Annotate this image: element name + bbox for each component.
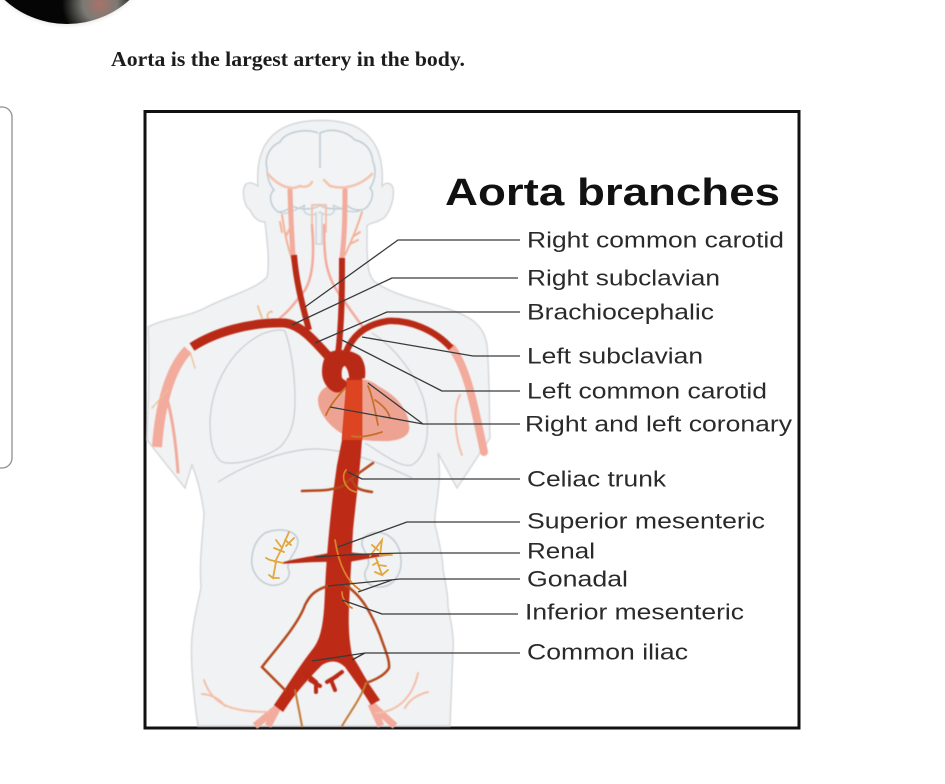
labels: Brachiocephalic	[527, 300, 714, 324]
aorta through heart	[342, 380, 362, 440]
leader lines	[292, 240, 520, 661]
icon: cropped dark circle	[0, 0, 160, 25]
descending aorta	[274, 378, 380, 712]
labels	[525, 228, 792, 664]
labels: Gonadal	[527, 566, 628, 592]
labels: Renal	[527, 538, 595, 564]
labels: Right subclavian	[527, 266, 720, 290]
brain	[266, 130, 375, 212]
brain stem	[316, 212, 322, 244]
labels: Common iliac	[527, 640, 688, 664]
labels: Left subclavian	[527, 344, 703, 368]
labels: Left common carotid	[527, 378, 767, 404]
heading: Aorta is the largest artery in the body.	[111, 47, 465, 71]
diaphragm	[218, 449, 412, 482]
heart	[318, 379, 409, 441]
aorta and main arteries	[192, 255, 451, 356]
kidney and coronary small vessels	[266, 386, 392, 608]
pale head and arm vessels	[152, 174, 484, 726]
labels: Right and left coronary	[525, 412, 792, 436]
title: Aorta branches: Aorta branches	[445, 172, 780, 214]
labels: Superior mesenteric	[527, 508, 765, 534]
side panel edge	[0, 107, 12, 468]
labels: Right common carotid	[527, 228, 784, 252]
kidneys	[252, 530, 298, 585]
labels: Inferior mesenteric	[525, 600, 744, 624]
aortic arch	[322, 350, 365, 393]
body silhouette	[147, 120, 490, 726]
lungs	[210, 330, 295, 463]
panel: diagram frame	[145, 112, 799, 728]
branch arteries	[262, 463, 390, 726]
labels: Celiac trunk	[527, 466, 667, 492]
